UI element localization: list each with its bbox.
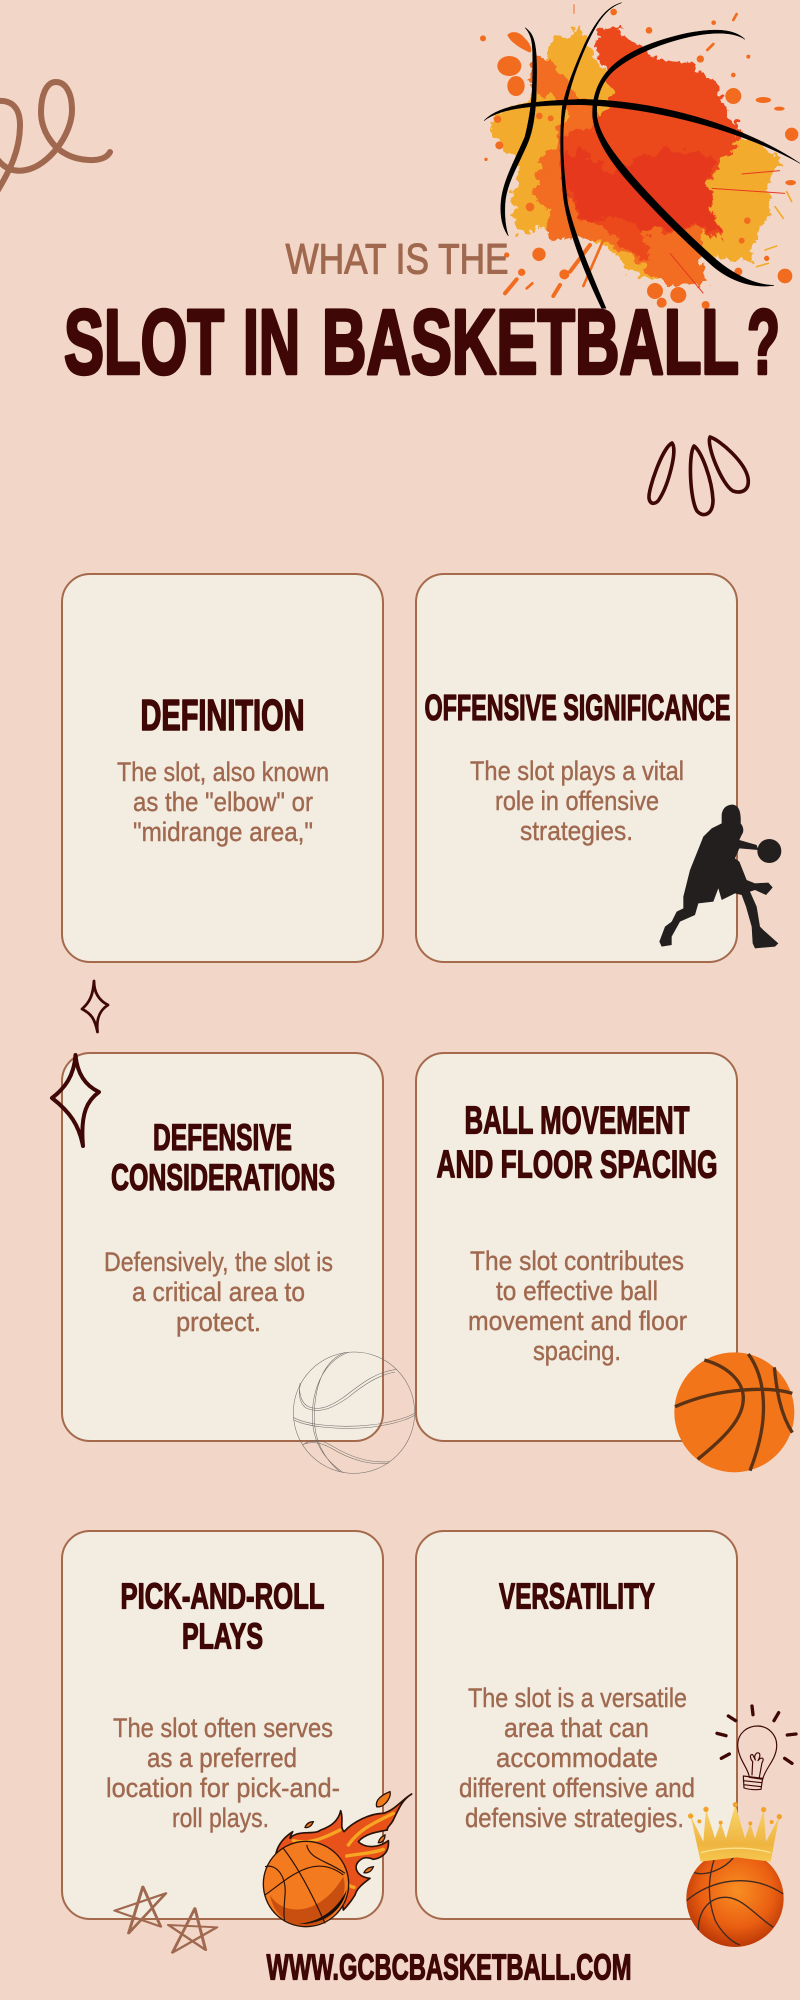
panel: defensive considerations: [62, 1053, 383, 1441]
heading: DEFINITION: [140, 691, 304, 740]
icon: small sparkle: [82, 981, 108, 1032]
body text: spacing.: [533, 1336, 621, 1366]
decoration: three petals: [649, 437, 748, 515]
body text: protect.: [176, 1307, 261, 1337]
card background: [416, 574, 737, 962]
body text: accommodate: [496, 1743, 658, 1773]
splash droplets: [480, 9, 798, 309]
body text: [470, 756, 684, 846]
ball: [686, 1850, 784, 1947]
body text: as the "elbow" or: [133, 787, 313, 817]
body text: to effective ball: [496, 1276, 658, 1306]
card background: [62, 1053, 383, 1441]
card background: [62, 574, 383, 962]
red streaks: [670, 171, 785, 293]
body text: defensive strategies.: [465, 1803, 684, 1833]
decoration: brown stars: [115, 1887, 217, 1953]
title: [64, 292, 780, 394]
heading: CONSIDERATIONS: [111, 1157, 335, 1198]
splash blobs top left: [497, 32, 531, 96]
heading: PLAYS: [182, 1616, 263, 1656]
illustration: paint splash basketball: [480, 3, 800, 309]
bulb outline: [738, 1726, 777, 1790]
flame sparks: [305, 1792, 390, 1873]
heading: PICK-AND-ROLL: [120, 1576, 324, 1616]
icon: flaming basketball: [263, 1792, 412, 1927]
ball: [263, 1841, 349, 1927]
splash streaks: [505, 5, 737, 296]
body text: The slot contributes: [470, 1246, 684, 1276]
body text: The slot plays a vital: [470, 756, 684, 786]
heading: [111, 1117, 335, 1198]
orange splash: [530, 53, 707, 287]
crown tips: [688, 1802, 782, 1825]
title: IN: [243, 292, 300, 394]
yellow streaks: [757, 192, 792, 267]
ball seams: [265, 1845, 345, 1923]
heading: DEFENSIVE: [153, 1117, 292, 1158]
body text: as a preferred: [147, 1743, 297, 1773]
yellow splash: [490, 30, 782, 280]
icon: player silhouette: [659, 805, 781, 948]
splash colour layers: [490, 27, 782, 287]
icon: basketball with crown: [686, 1802, 784, 1947]
body text: Defensively, the slot is: [104, 1247, 333, 1277]
flames: [276, 1794, 412, 1910]
panel: definition: [62, 574, 383, 962]
body text: "midrange area,": [133, 817, 313, 847]
body text: [117, 757, 329, 847]
body text: role in offensive: [495, 786, 659, 816]
panel: offensive significance: [416, 574, 737, 962]
flame highlights: [293, 1813, 393, 1887]
card background: [416, 1531, 737, 1919]
crown band highlight: [701, 1848, 771, 1853]
icon: large sparkle: [52, 1055, 99, 1146]
body text: The slot, also known: [117, 757, 329, 787]
heading: [120, 1576, 324, 1656]
body text: location for pick-and-: [106, 1773, 340, 1803]
ball seam lines: [484, 3, 800, 308]
body text: [459, 1683, 695, 1833]
heading: BALL MOVEMENT: [464, 1100, 690, 1142]
body text: [468, 1246, 687, 1366]
heading: VERSATILITY: [499, 1576, 655, 1616]
title: SLOT: [64, 292, 224, 394]
body text: strategies.: [520, 816, 633, 846]
body text: The slot often serves: [113, 1713, 333, 1743]
body text: [106, 1713, 340, 1833]
icon: orange basketball: [674, 1352, 794, 1472]
panel: versatility: [416, 1531, 737, 1919]
deep red centre: [563, 150, 722, 235]
card background: [416, 1053, 737, 1441]
icon: outline basketball: [293, 1352, 415, 1473]
icon: light bulb: [717, 1706, 796, 1790]
ball seams: [687, 1857, 783, 1945]
red splash: [560, 27, 742, 260]
body text: roll plays.: [172, 1803, 269, 1833]
heading: [436, 1100, 718, 1186]
panel: pick-and-roll plays: [62, 1531, 383, 1919]
ball shadow: [270, 1877, 345, 1926]
body text: The slot is a versatile: [468, 1683, 687, 1713]
body text: [104, 1247, 333, 1337]
crown: [691, 1804, 779, 1862]
subtitle: what is the: WHAT IS THE: [286, 236, 508, 284]
body text: movement and floor: [468, 1306, 687, 1336]
body text: a critical area to: [132, 1277, 305, 1307]
ball dark crescent: [298, 1890, 347, 1924]
card background: [62, 1531, 383, 1919]
body text: different offensive and: [459, 1773, 695, 1803]
decoration: swirl top left: [0, 82, 110, 190]
body text: area that can: [504, 1713, 649, 1743]
panel: ball movement and floor spacing: [416, 1053, 737, 1441]
bulb rays: [717, 1706, 796, 1763]
